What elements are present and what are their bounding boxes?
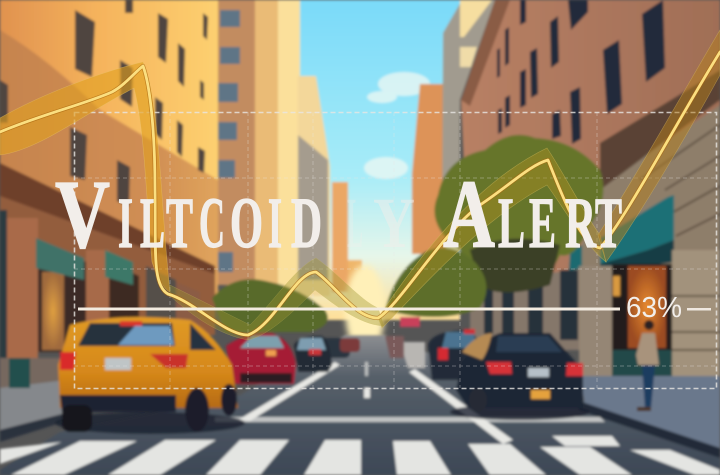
tree left (212, 279, 328, 332)
building: right distant orange (412, 84, 446, 254)
cornice wedge (600, 70, 720, 190)
title: E (529, 183, 556, 263)
title: D (291, 183, 322, 263)
title: T (166, 183, 193, 263)
red car (226, 333, 296, 384)
right bottom plinth (612, 350, 672, 380)
road (0, 335, 720, 475)
tree mid (385, 248, 486, 317)
awning (600, 195, 674, 264)
building: pale right tower (442, 0, 495, 230)
clouds (364, 72, 430, 179)
planter (9, 358, 30, 388)
ribbon middle segment (170, 258, 384, 340)
right storefronts (470, 268, 585, 350)
title: O (230, 183, 263, 263)
title: R (565, 183, 597, 263)
right facade windows (497, 0, 665, 144)
title: L (498, 183, 525, 263)
building: bright tower (255, 0, 281, 290)
left facade windows (0, 0, 208, 207)
title: L (347, 183, 363, 263)
title: V (55, 161, 110, 269)
shop window (612, 264, 672, 352)
dark car left (294, 336, 332, 372)
car shadows (55, 412, 245, 434)
building: far left tower (214, 0, 258, 285)
title: C (199, 183, 225, 263)
left storefront band (0, 170, 215, 335)
title: I (268, 183, 282, 263)
left sidewalk (0, 375, 70, 430)
title: Y (373, 183, 415, 263)
building: right brown facade (461, 0, 720, 300)
title: L (140, 183, 165, 263)
tree right (434, 135, 603, 289)
ribbon rising segment (598, 30, 720, 262)
sky (290, 0, 460, 320)
title (55, 161, 622, 269)
black sedan (456, 333, 583, 412)
pink sign (400, 317, 420, 327)
building: distant pale blocks (298, 76, 330, 296)
grid lines (74, 112, 716, 388)
ribbon right segment (378, 148, 606, 328)
right sidewalk (580, 376, 720, 452)
yellow taxi car (58, 317, 238, 432)
right stone building (580, 105, 720, 390)
chart ribbon: translucent band (0, 30, 720, 340)
distant white cars right (385, 336, 425, 368)
percentage label: 63% (626, 292, 682, 324)
chart line: volatility curve (0, 52, 720, 335)
road lane markings (215, 362, 605, 444)
dashed outline (74, 112, 716, 388)
building: left orange facade (0, 0, 218, 330)
left storefront columns and glass (0, 210, 200, 360)
distant parked cars left (320, 338, 360, 358)
left curb (0, 412, 70, 442)
pedestrian (636, 320, 659, 411)
vanishing glow (345, 265, 385, 355)
title: A (443, 161, 495, 269)
SUV right (428, 329, 480, 380)
title: I (118, 183, 133, 263)
ribbon left segment (0, 62, 170, 292)
baseline rule (78, 308, 620, 310)
crosswalk stripes (0, 436, 720, 475)
title: T (595, 183, 622, 263)
chart frame: dashed plot border (74, 112, 716, 388)
percentage dash (687, 308, 711, 310)
